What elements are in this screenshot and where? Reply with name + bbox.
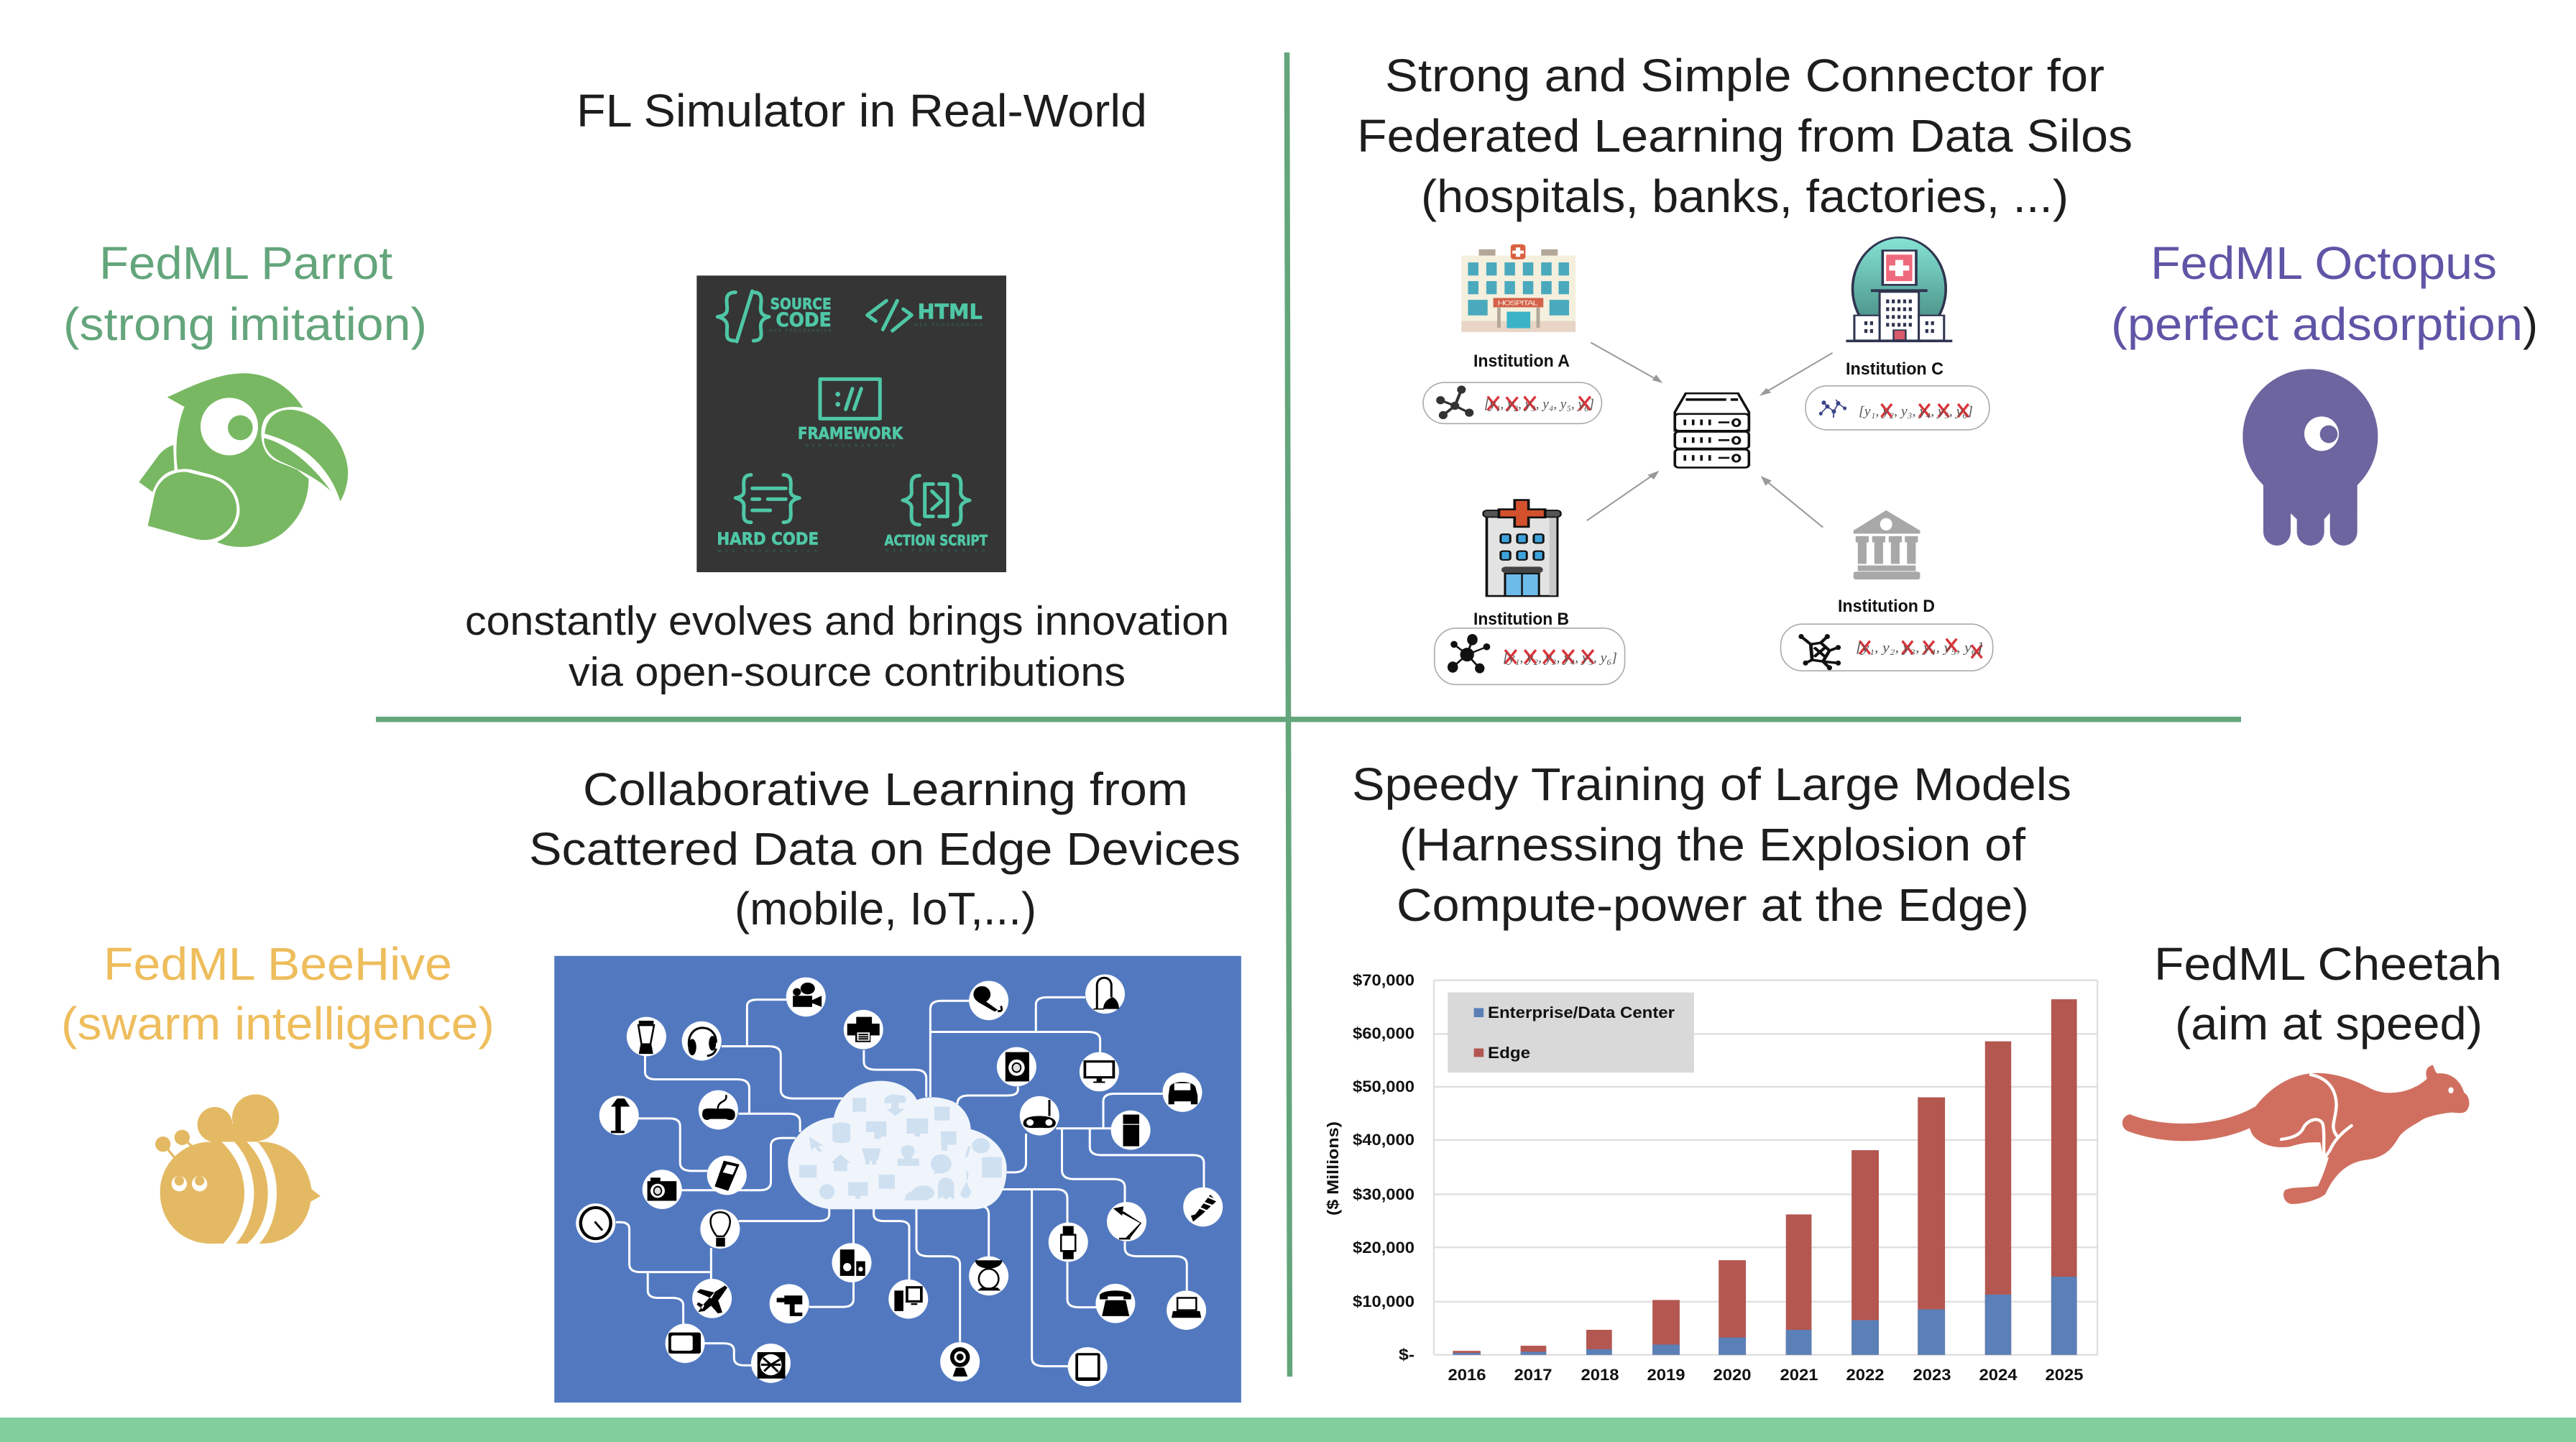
quadrant divider: vertical — [1284, 52, 1292, 1377]
heading: speedy training: Speedy Training of Large Models — [1352, 758, 2071, 810]
label: FedML Octopus: ) — [2523, 298, 2538, 350]
legend panel — [1448, 993, 1694, 1073]
quadrant divider: horizontal — [376, 717, 2241, 722]
label: FedML Cheetah — [2154, 938, 2502, 1050]
data box D — [1781, 624, 1993, 671]
text: open-source note: constantly evolves and brings innovation — [465, 598, 1229, 644]
axis: y ticks: $30,000 — [1353, 1185, 1414, 1203]
label vectors: [y₁, y₂, y₃, y₄, y₅, y₆] — [1859, 404, 1973, 419]
logo: hard code: WEB PROGRAMMING — [717, 549, 817, 554]
axis: year labels: 2018 — [1581, 1366, 1619, 1384]
data box A — [1423, 382, 1601, 423]
logo: source code: SOURCE — [770, 295, 832, 313]
heading: connector: (hospitals, banks, factories, ...) — [1421, 170, 2069, 222]
enterprise series — [1453, 1277, 2077, 1355]
axis: year labels: 2024 — [1979, 1366, 2018, 1384]
logo: action script — [885, 476, 988, 553]
axis: year labels: 2022 — [1846, 1366, 1885, 1384]
device nodes — [576, 974, 1223, 1387]
label: FedML Octopus: FedML Octopus — [2150, 237, 2497, 289]
label vectors: [y₁, y₂, y₃, y₄, y₅, y₆] — [1856, 640, 1983, 656]
axis: year labels: 2021 — [1780, 1366, 1818, 1384]
axis: year labels: 2025 — [2046, 1366, 2083, 1384]
axis: y ticks: $70,000 — [1353, 971, 1414, 989]
heading: connector — [1357, 50, 2133, 222]
heading: FL Simulator: FL Simulator in Real-World — [576, 85, 1147, 137]
icon: hospital A — [1461, 244, 1576, 332]
legend text — [1488, 1004, 1675, 1062]
logo: framework: FRAMEWORK — [798, 426, 903, 444]
logo: source code: CODE — [776, 309, 832, 331]
arrows to server — [1587, 343, 1833, 528]
heading: speedy training — [1352, 758, 2071, 931]
label: FedML Parrot — [63, 237, 427, 350]
legend text: Edge — [1488, 1044, 1530, 1062]
institution labels — [1473, 352, 1944, 629]
logo: hard code: HARD CODE — [717, 528, 819, 548]
heading: collaborative learning: (mobile, IoT,...) — [735, 883, 1036, 934]
institution labels: Institution C — [1846, 359, 1944, 379]
axis: y ticks: $40,000 — [1353, 1131, 1414, 1149]
axis: year labels: 2017 — [1514, 1366, 1552, 1384]
institution labels: Institution A — [1473, 352, 1570, 371]
heading: collaborative learning: Collaborative Learning from — [583, 763, 1188, 815]
axis: y ticks: $- — [1399, 1346, 1414, 1364]
label: FedML Cheetah: FedML Cheetah — [2154, 938, 2502, 990]
label: FedML Octopus: (perfect adsorption — [2111, 298, 2523, 350]
icon: octopus — [2242, 369, 2378, 546]
device glyphs — [579, 978, 1218, 1381]
logo: source code — [717, 291, 832, 341]
axis: y ticks: $20,000 — [1353, 1239, 1414, 1257]
heading: connector: Strong and Simple Connector for — [1385, 50, 2104, 101]
icon: parrot — [139, 373, 348, 547]
label vectors: [y₁, y₂, y₃, y₄, y₅, y₆] — [1503, 651, 1617, 666]
grid — [1434, 981, 2097, 1355]
logo: framework — [798, 379, 903, 449]
institution labels: Institution B — [1473, 610, 1569, 629]
label: FedML Parrot: (strong imitation) — [63, 298, 427, 350]
cloud — [788, 1081, 1007, 1209]
heading: collaborative learning — [529, 763, 1241, 934]
icon: hospital C — [1846, 237, 1952, 342]
icon: hospital B — [1484, 500, 1560, 596]
logo: html — [868, 299, 983, 331]
text: open-source note — [465, 598, 1229, 695]
axis: y ticks: $10,000 — [1353, 1292, 1414, 1310]
icon: bee — [155, 1094, 321, 1244]
label: FedML BeeHive: (swarm intelligence) — [61, 998, 494, 1050]
icon: bank D — [1854, 510, 1920, 579]
bottom bar — [0, 1418, 2576, 1442]
diagram: federated institutions — [1423, 237, 1993, 684]
logo: framework: WEB PROGRAMMING — [805, 444, 895, 449]
heading: speedy training: Compute-power at the Edge) — [1397, 879, 2029, 931]
logo: html: WEB PROGRAMMING — [914, 323, 983, 327]
label: FedML Parrot: FedML Parrot — [99, 237, 392, 289]
label: FedML BeeHive: FedML BeeHive — [104, 938, 452, 990]
label: FedML Octopus — [2111, 237, 2538, 350]
legend text: Enterprise/Data Center — [1488, 1004, 1675, 1021]
label: FedML BeeHive — [61, 938, 494, 1050]
logo: html: HTML — [918, 299, 983, 323]
panel: IoT image — [554, 956, 1241, 1402]
icon: hospital A: HOSPITAL — [1498, 300, 1539, 307]
text: open-source note: via open-source contributions — [569, 649, 1126, 695]
label vectors: [y₁, y₂, y₃, y₄, y₅, y₆] — [1484, 397, 1594, 412]
logo: hard code — [717, 475, 819, 554]
heading: connector: Federated Learning from Data Silos — [1357, 110, 2133, 162]
panel: code image — [696, 275, 1006, 572]
logo: action script: ACTION SCRIPT — [885, 532, 988, 548]
axis title: ($ Millions) — [1324, 1121, 1342, 1216]
axis: y ticks — [1353, 971, 1414, 1364]
label vectors — [1484, 397, 1983, 666]
axis: y ticks: $60,000 — [1353, 1024, 1414, 1042]
bar chart: edge vs enterprise spending — [1324, 971, 2097, 1384]
logo: source code: WEB PROGRAMMING — [769, 329, 832, 334]
icon: central server — [1675, 393, 1749, 467]
axis: year labels: 2016 — [1448, 1366, 1486, 1384]
data box B — [1435, 628, 1625, 684]
heading: collaborative learning: Scattered Data on Edge Devices — [529, 823, 1241, 875]
axis: year labels: 2019 — [1647, 1366, 1685, 1384]
axis: year labels: 2023 — [1913, 1366, 1951, 1384]
logo: action script: WEB PROGRAMMING — [886, 548, 985, 553]
heading: speedy training: (Harnessing the Explosion of — [1399, 819, 2025, 871]
icon: cheetah — [2122, 1065, 2469, 1204]
axis: y ticks: $50,000 — [1353, 1078, 1414, 1096]
axis: year labels: 2020 — [1714, 1366, 1751, 1384]
label: FedML Cheetah: (aim at speed) — [2175, 998, 2483, 1050]
connectors — [616, 997, 1204, 1367]
institution labels: Institution D — [1838, 597, 1935, 616]
data box C — [1806, 386, 1990, 430]
axis: year labels — [1448, 1366, 2083, 1384]
edge series — [1453, 999, 2077, 1355]
